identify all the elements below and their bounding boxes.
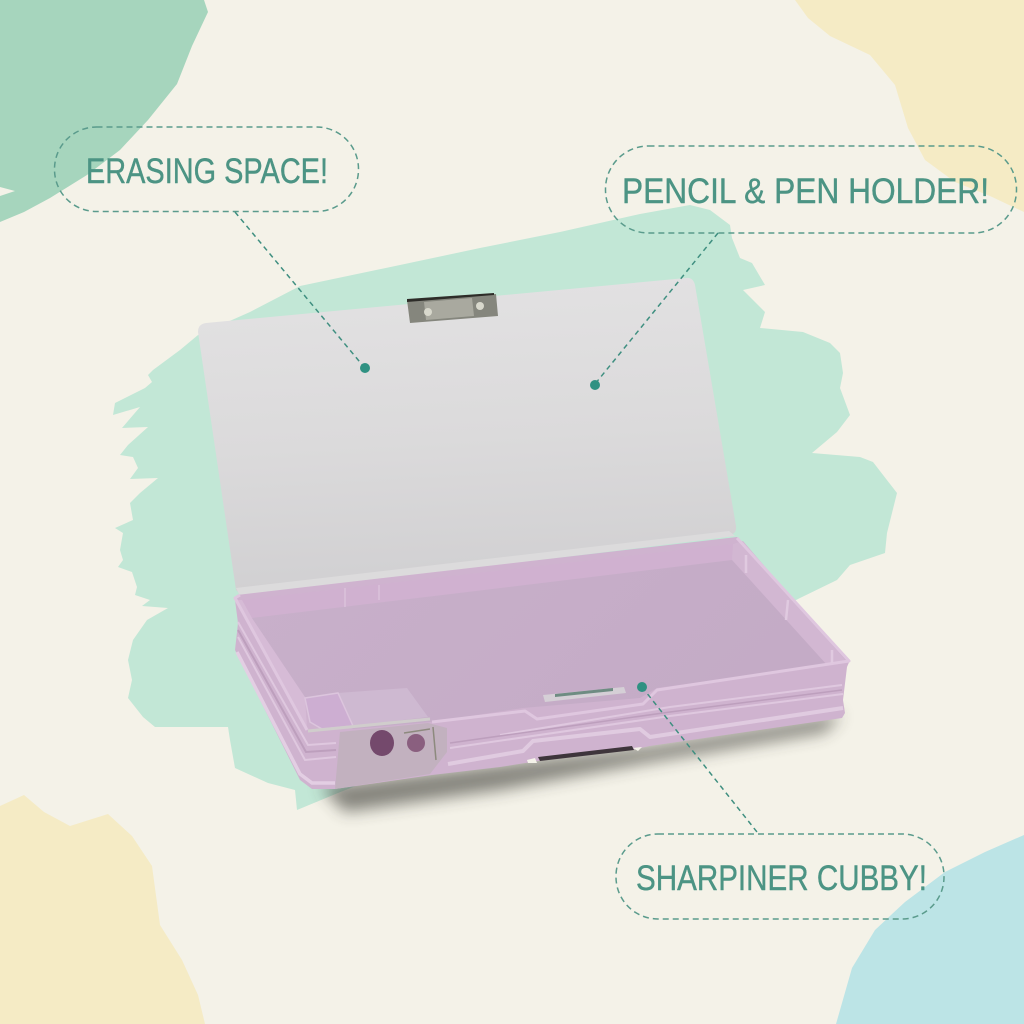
small compartment — [305, 693, 353, 729]
tray rim highlight — [235, 538, 849, 730]
clear band top edge — [308, 719, 430, 731]
callout: sharpener cubby: SHARPINER CUBBY! — [636, 859, 927, 898]
brush stroke: bottom-left yellow — [0, 795, 205, 1024]
tray left inner wall — [235, 600, 307, 728]
transparent sharpener front — [335, 723, 447, 789]
shadow under case — [320, 714, 842, 812]
brush stroke: top-right yellow — [795, 0, 1024, 212]
tray back wall — [242, 544, 733, 618]
open lid — [198, 278, 736, 594]
callout: erasing space: ERASING SPACE! — [86, 152, 328, 191]
compartment lid block — [338, 688, 428, 726]
latch slot on floor — [543, 687, 626, 702]
wall ribs — [345, 555, 832, 663]
front face ridges — [448, 685, 843, 764]
callout: sharpener cubby — [616, 834, 944, 919]
metal clip — [407, 293, 498, 323]
left side ridges — [237, 622, 336, 783]
tray right inner wall — [732, 541, 845, 665]
lid hinge strip — [236, 531, 735, 596]
brush stroke: top-left green — [0, 0, 208, 222]
brush stroke: bottom-right blue — [836, 835, 1024, 1024]
tray outer body — [235, 537, 850, 789]
leader line: sharpener cubby — [637, 682, 757, 832]
callout: pencil and pen holder — [606, 146, 1016, 233]
latch recess — [527, 746, 642, 763]
callout: erasing space — [54, 127, 358, 212]
brush stroke: central mint — [113, 205, 897, 810]
sharpener hole small — [407, 734, 425, 752]
leader line: pencil and pen holder — [590, 233, 718, 390]
sharpener clip — [404, 727, 436, 760]
tray floor — [252, 560, 827, 729]
callout: pencil and pen holder: PENCIL & PEN HOLDER! — [622, 172, 989, 211]
pencil case — [198, 278, 850, 812]
sharpener hole large — [370, 730, 394, 756]
sharpener cubby — [305, 688, 447, 789]
leader line: erasing space — [235, 212, 370, 373]
